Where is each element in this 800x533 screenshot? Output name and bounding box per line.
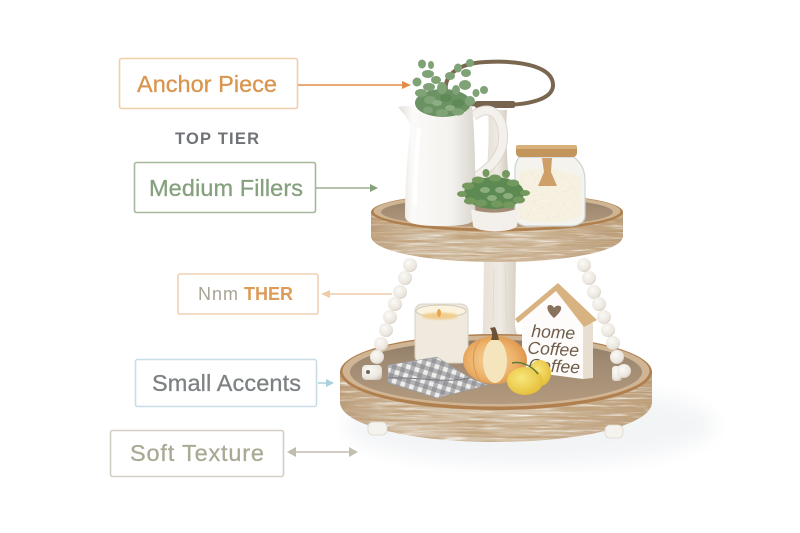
panel: label Medium Fillers: Medium Fillers [149,175,303,201]
house sign: Coffee [528,355,581,377]
house sign: home [531,321,576,343]
illustration: two tier tray [340,59,715,465]
panel: label Small Accents: Small Accents [152,370,301,396]
heading: top tier: TOP TIER [175,130,259,148]
panel: label Anchor Piece [120,58,298,108]
panel: label lower tier [178,274,318,314]
panel: label lower tier: Nnm [198,284,238,304]
arrow: medium fillers to top tier [316,184,378,192]
handle post [485,110,510,200]
house sign [515,283,597,379]
tray shadow [345,385,715,465]
pumpkin [463,327,527,384]
panel: label lower tier: THER [244,284,293,304]
panel: label Anchor Piece: Anchor Piece [137,71,277,97]
arrow: soft texture double headed [287,447,358,457]
small potted plant [457,169,530,231]
arrow: anchor piece to pitcher [298,81,411,89]
house sign: Coffee [527,338,580,360]
panel: label Soft Texture [110,430,284,476]
infographic: tiered tray styling guide [110,58,706,478]
glass jar [515,145,585,226]
panel: label Medium Fillers [134,162,316,212]
lemons [507,360,551,395]
arrow: lower tier label [321,290,392,298]
left bead strand [362,258,417,380]
panel: label Soft Texture: Soft Texture [130,440,264,466]
right bead strand [577,258,631,381]
top tray [371,198,623,262]
panel: label Small Accents [136,360,316,406]
plant in pitcher [412,59,488,117]
lower pole [476,258,524,352]
candle [415,304,468,363]
white pitcher [398,106,503,226]
handle loop [446,62,553,108]
bottom tray [340,334,652,444]
gingham napkin [388,357,488,398]
feet [368,422,623,438]
arrow: small accents [318,379,334,387]
